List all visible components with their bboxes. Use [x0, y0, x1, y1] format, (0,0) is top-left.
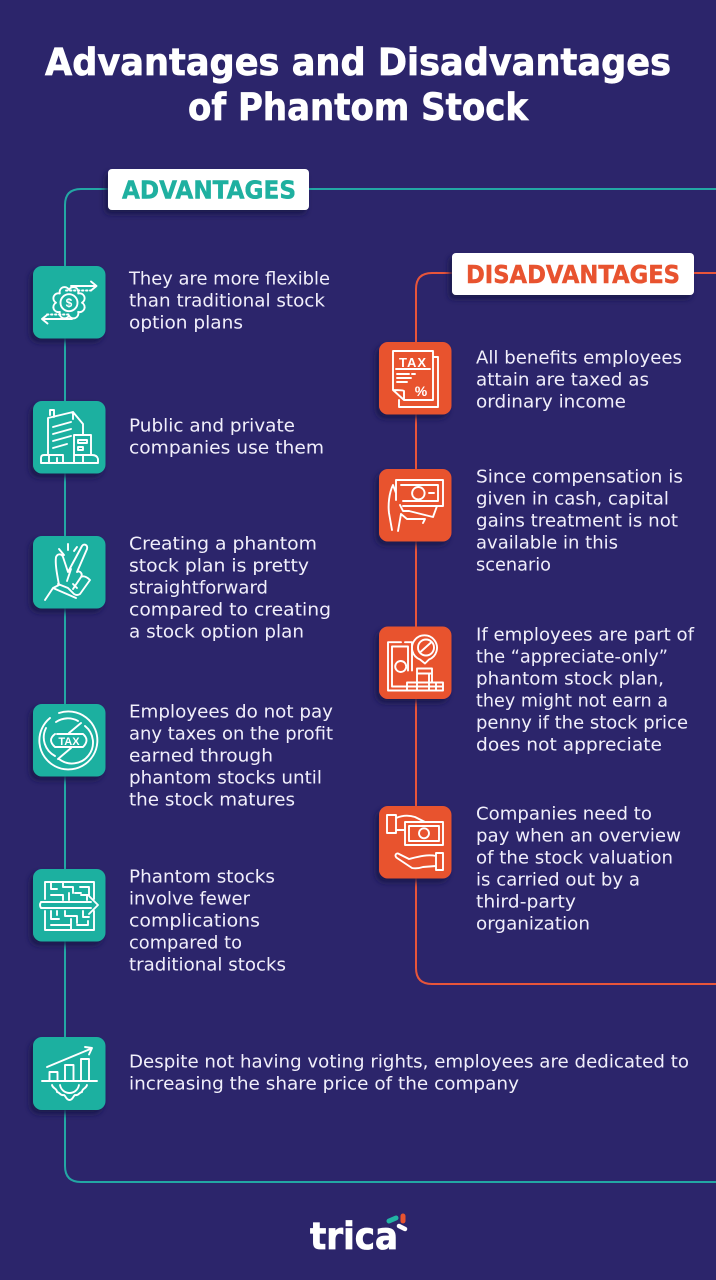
item: share price	[33, 1037, 689, 1110]
logo: trica: trica	[310, 1215, 398, 1258]
text: public and private	[129, 416, 324, 458]
text: straightforward: a stock option plan	[129, 622, 304, 642]
text: appreciate-only: they might not earn a	[476, 692, 668, 712]
icon: office building	[33, 401, 106, 474]
text: fewer complications	[129, 868, 286, 976]
item: straightforward	[33, 534, 331, 642]
icon: hand holding cash	[379, 469, 452, 542]
item: fewer complications	[33, 868, 286, 976]
item: valuation cost	[379, 804, 681, 934]
text: appreciate-only: phantom stock plan,	[476, 670, 664, 690]
disadvantages heading: DISADVANTAGES	[466, 260, 680, 289]
text: flexible: They are more flexible	[128, 270, 330, 290]
disadvantages heading	[452, 253, 694, 295]
item: flexible	[33, 266, 330, 338]
icon: banknote, price pin and coins	[379, 626, 452, 699]
text: straightforward: stock plan is pretty	[129, 556, 309, 576]
text: appreciate-only	[476, 626, 695, 756]
text: valuation cost	[476, 804, 681, 934]
text: public and private: Public and private	[129, 416, 295, 436]
text: valuation cost: Companies need to	[476, 804, 652, 824]
icon: hands passing money	[379, 806, 452, 878]
text: valuation cost: is carried out by a	[476, 870, 640, 890]
text: valuation cost: organization	[476, 914, 590, 934]
panel: disadvantages	[379, 253, 716, 984]
text: flexible	[128, 270, 330, 334]
text: valuation cost: of the stock valuation	[476, 848, 673, 868]
text: straightforward	[129, 534, 331, 642]
icon: money gear with arrows: $	[66, 296, 73, 310]
icon: tax document: %	[415, 383, 428, 399]
panel: advantages	[33, 169, 716, 1182]
text: taxed	[476, 348, 682, 412]
icon: tax prohibited: TAX	[58, 736, 80, 748]
advantages heading: ADVANTAGES	[122, 176, 296, 204]
text: no taxes: phantom stocks until	[129, 768, 322, 788]
text: taxed: ordinary income	[476, 392, 626, 412]
text: appreciate-only: penny if the stock price	[476, 714, 688, 734]
icon: money gear with arrows	[33, 266, 106, 338]
text: cash compensation: given in cash, capital	[476, 490, 669, 510]
text: cash compensation: Since compensation is	[476, 468, 683, 488]
item: public and private	[33, 401, 324, 474]
text: appreciate-only: does not appreciate	[476, 736, 662, 756]
text: valuation cost: third-party	[476, 892, 576, 912]
icon: tax document: TAX	[399, 355, 427, 370]
text: fewer complications: Phantom stocks	[129, 868, 275, 888]
text: appreciate-only: If employees are part of	[476, 626, 695, 646]
text: no taxes: any taxes on the profit	[129, 724, 333, 744]
text: no taxes: Employees do not pay	[129, 702, 333, 722]
disadvantages connector line	[416, 273, 716, 984]
text: share price: Despite not having voting rights, employees are dedicated to	[129, 1052, 689, 1072]
text: flexible: option plans	[129, 314, 243, 334]
text: cash compensation: available in this	[476, 534, 618, 554]
text: no taxes: earned through	[129, 746, 273, 766]
text: share price	[129, 1052, 689, 1094]
icon: snapping fingers	[33, 536, 106, 608]
title: of Phantom Stock	[188, 86, 529, 129]
text: flexible: than traditional stock	[129, 292, 326, 312]
text: cash compensation: scenario	[476, 556, 551, 576]
text: fewer complications: complications	[129, 912, 260, 932]
text: share price: increasing the share price of the company	[129, 1074, 519, 1094]
text: no taxes: the stock matures	[129, 790, 295, 810]
icon: tax document	[379, 342, 452, 414]
advantages heading	[108, 169, 309, 210]
text: public and private: companies use them	[129, 438, 324, 458]
title	[45, 41, 671, 129]
text: cash compensation: gains treatment is not	[476, 512, 678, 532]
text: straightforward: straightforward	[129, 578, 268, 598]
text: fewer complications: involve fewer	[129, 890, 251, 910]
text: cash compensation	[476, 468, 683, 576]
icon: tax prohibited	[33, 704, 106, 776]
icon: growth chart with gear	[33, 1037, 106, 1110]
text: taxed: attain are taxed as	[476, 370, 649, 390]
item: cash compensation	[379, 468, 683, 576]
text: no taxes	[129, 702, 333, 810]
item: taxed	[379, 342, 682, 414]
text: appreciate-only: the “appreciate-only”	[476, 648, 668, 668]
item: no taxes	[33, 702, 333, 810]
text: fewer complications: traditional stocks	[129, 956, 286, 976]
icon: maze with arrow	[33, 869, 106, 942]
text: valuation cost: pay when an overview	[476, 826, 681, 846]
text: straightforward: Creating a phantom	[129, 534, 317, 554]
text: taxed: All benefits employees	[476, 348, 682, 368]
title: Advantages and Disadvantages	[45, 41, 671, 84]
text: fewer complications: compared to	[129, 934, 242, 954]
advantages connector line	[65, 189, 716, 1182]
item: appreciate-only	[379, 626, 695, 756]
text: straightforward: compared to creating	[129, 600, 331, 620]
